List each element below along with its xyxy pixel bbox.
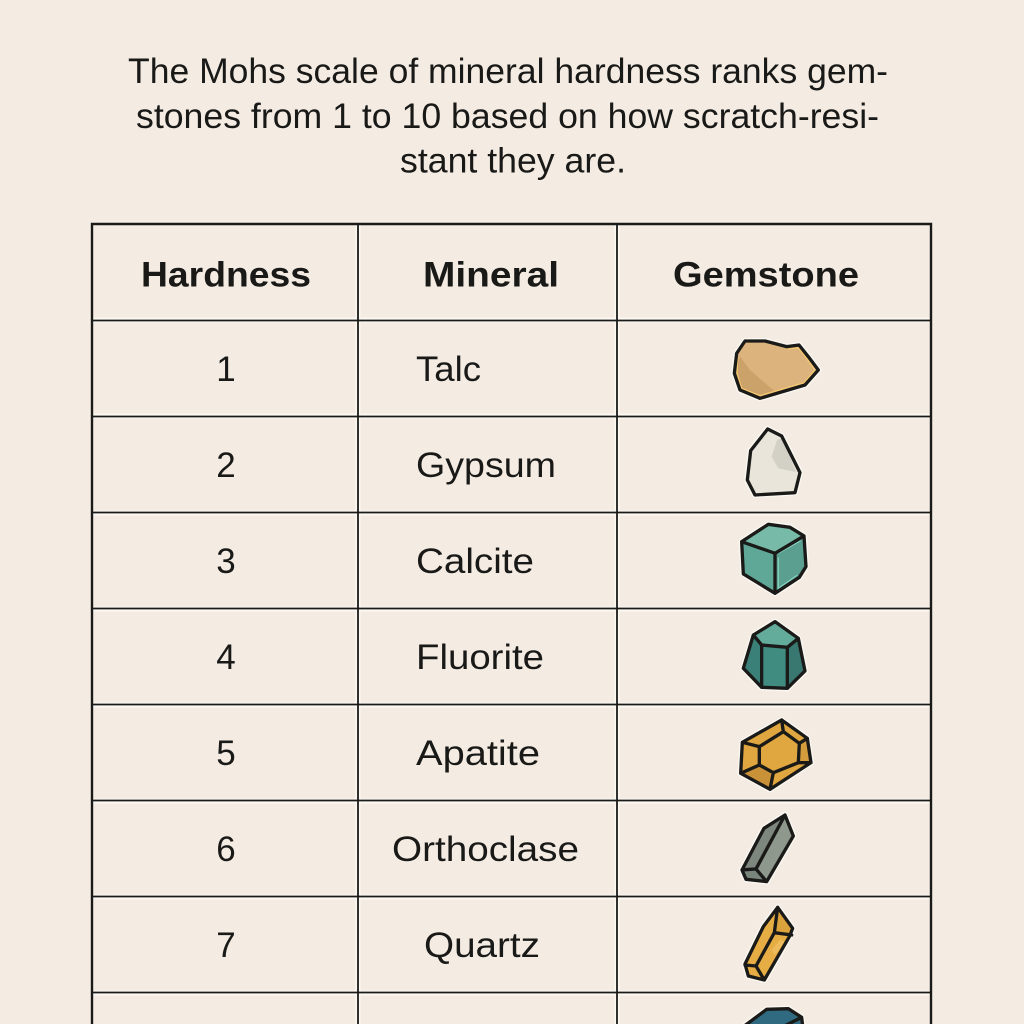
mineral: Fluorite: Fluorite: [416, 638, 544, 677]
row 1: Talc: [92, 320, 931, 416]
icon: orthoclase crystal: [742, 815, 793, 882]
mineral: Calcite: Calcite: [416, 542, 534, 581]
header: Mineral: Mineral: [423, 256, 559, 294]
hardness 4: 4: [216, 638, 236, 677]
header: Gemstone: Gemstone: [673, 256, 859, 294]
row 2: Gypsum: [92, 416, 931, 513]
intro text: The Mohs scale of mineral hardness ranks gem-: [128, 52, 888, 91]
icon: apatite gem: [741, 720, 811, 789]
intro text: stant they are.: [400, 142, 626, 180]
row 7: Quartz: [92, 897, 931, 993]
hardness 5: 5: [216, 734, 236, 773]
intro text: stones from 1 to 10 based on how scratch-resi-: [136, 97, 879, 136]
icon: calcite cube: [742, 524, 806, 593]
icon: gypsum stone: [747, 429, 800, 495]
icon: talc stone: [734, 341, 818, 398]
row 5: Apatite: [92, 705, 931, 801]
icon: cropped blue gem: [737, 1009, 803, 1024]
row 6: Orthoclase: [92, 801, 931, 897]
mineral: Orthoclase: Orthoclase: [392, 830, 579, 869]
hardness 3: 3: [216, 542, 236, 581]
icon: quartz crystal: [745, 907, 793, 980]
row 8: cropped gem: [617, 993, 931, 1024]
mineral: Apatite: Apatite: [416, 734, 540, 773]
mineral: Talc: Talc: [416, 350, 481, 389]
hardness 2: 2: [216, 446, 236, 485]
hardness 6: 6: [216, 830, 236, 869]
mineral: Gypsum: Gypsum: [416, 446, 556, 485]
header: Hardness: Hardness: [141, 256, 311, 294]
hardness 1: 1: [216, 350, 236, 389]
header row: [92, 224, 931, 320]
hardness 7: 7: [216, 926, 236, 965]
hardness table: [92, 224, 931, 1024]
row 3: Calcite: [92, 513, 931, 609]
icon: fluorite crystal: [743, 622, 805, 688]
intro text: [128, 52, 888, 180]
row 4: Fluorite: [92, 609, 931, 705]
mineral: Quartz: Quartz: [424, 926, 540, 965]
